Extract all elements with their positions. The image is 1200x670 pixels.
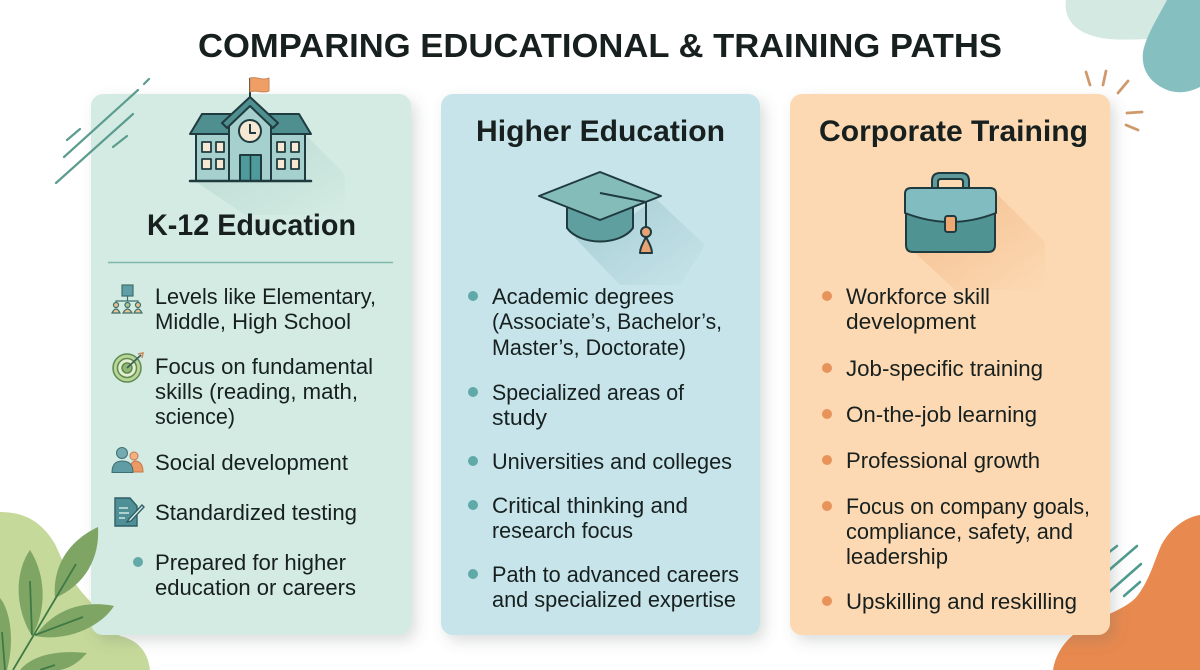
blob: bottom right orange xyxy=(1053,515,1200,670)
list: corporate training items: On-the-job learning xyxy=(846,402,1037,427)
text: prepared xyxy=(155,550,356,600)
text: fundamentals: skills (reading, math, xyxy=(155,379,358,404)
list: corporate training items: development xyxy=(846,309,976,334)
panel: K-12 education xyxy=(91,78,411,635)
plant: leaves xyxy=(0,527,114,670)
text: levels: Levels like Elementary, xyxy=(155,284,376,309)
heading: Corporate Training: Corporate Training xyxy=(819,115,1088,148)
leaf: right xyxy=(35,604,114,637)
title: COMPARING EDUCATIONAL & TRAINING PATHS xyxy=(198,27,1002,64)
text: testing: Standardized testing xyxy=(155,500,357,525)
list: higher education items: research focus xyxy=(492,518,633,543)
text: fundamentals xyxy=(155,354,373,429)
heading: Higher Education: Higher Education xyxy=(476,115,725,148)
list: higher education items: Universities and colleges xyxy=(492,449,732,474)
leaf: upper xyxy=(55,527,98,598)
list: higher education items: (Associate’s, Bachelor’s, xyxy=(492,309,722,334)
blob: top right teal xyxy=(1143,0,1200,92)
list: higher education items: Master’s, Doctorate) xyxy=(492,335,686,360)
leaf: bottom xyxy=(20,652,87,670)
icon: hierarchy xyxy=(112,285,142,313)
text: social: Social development xyxy=(155,450,348,475)
list: corporate training items: compliance, safety, and xyxy=(846,519,1073,544)
list: higher education items: Critical thinking and xyxy=(492,493,688,518)
bullet: prepared xyxy=(133,557,143,567)
list: corporate training items: leadership xyxy=(846,544,948,569)
list: higher education items: Specialized areas of xyxy=(492,380,685,405)
icon: graduation cap xyxy=(539,172,705,285)
icon: target xyxy=(113,353,143,382)
list: corporate training items: Professional growth xyxy=(846,448,1040,473)
list: corporate training items xyxy=(822,284,1090,614)
list: corporate training items: Upskilling and reskilling xyxy=(846,589,1077,614)
list: corporate training items: Focus on company goals, xyxy=(846,494,1090,519)
panel: higher education xyxy=(441,94,760,635)
list: corporate training items: Workforce skill xyxy=(846,284,990,309)
lines: top left accent xyxy=(56,79,149,183)
blob: bottom left green xyxy=(0,512,150,670)
list: corporate training items: Job-specific training xyxy=(846,356,1043,381)
stem xyxy=(2,564,83,670)
panel: corporate training xyxy=(790,94,1110,635)
icon: briefcase xyxy=(905,173,1045,290)
list: higher education items: Academic degrees xyxy=(492,284,674,309)
icon: school xyxy=(190,78,345,215)
blob: top right pale xyxy=(1066,0,1170,40)
heading: K-12 Education: K-12 Education xyxy=(147,209,356,242)
text: fundamentals: science) xyxy=(155,404,235,429)
text: prepared: Prepared for higher xyxy=(155,550,346,575)
lines: bottom right accent xyxy=(1108,546,1141,596)
leaf: middle xyxy=(19,550,43,636)
list: higher education items: and specialized expertise xyxy=(492,587,736,612)
icon: document and pen xyxy=(115,498,144,526)
rays: top right accent xyxy=(1086,71,1142,130)
list: higher education items: study xyxy=(492,405,547,430)
list: higher education items: Path to advanced careers xyxy=(492,562,739,587)
text: fundamentals: Focus on fundamental xyxy=(155,354,373,379)
icon: people xyxy=(112,448,143,472)
list: higher education items xyxy=(468,284,739,612)
text: levels xyxy=(155,284,376,334)
leaf: left xyxy=(0,598,11,670)
text: prepared: education or careers xyxy=(155,575,356,600)
text: levels: Middle, High School xyxy=(155,309,351,334)
